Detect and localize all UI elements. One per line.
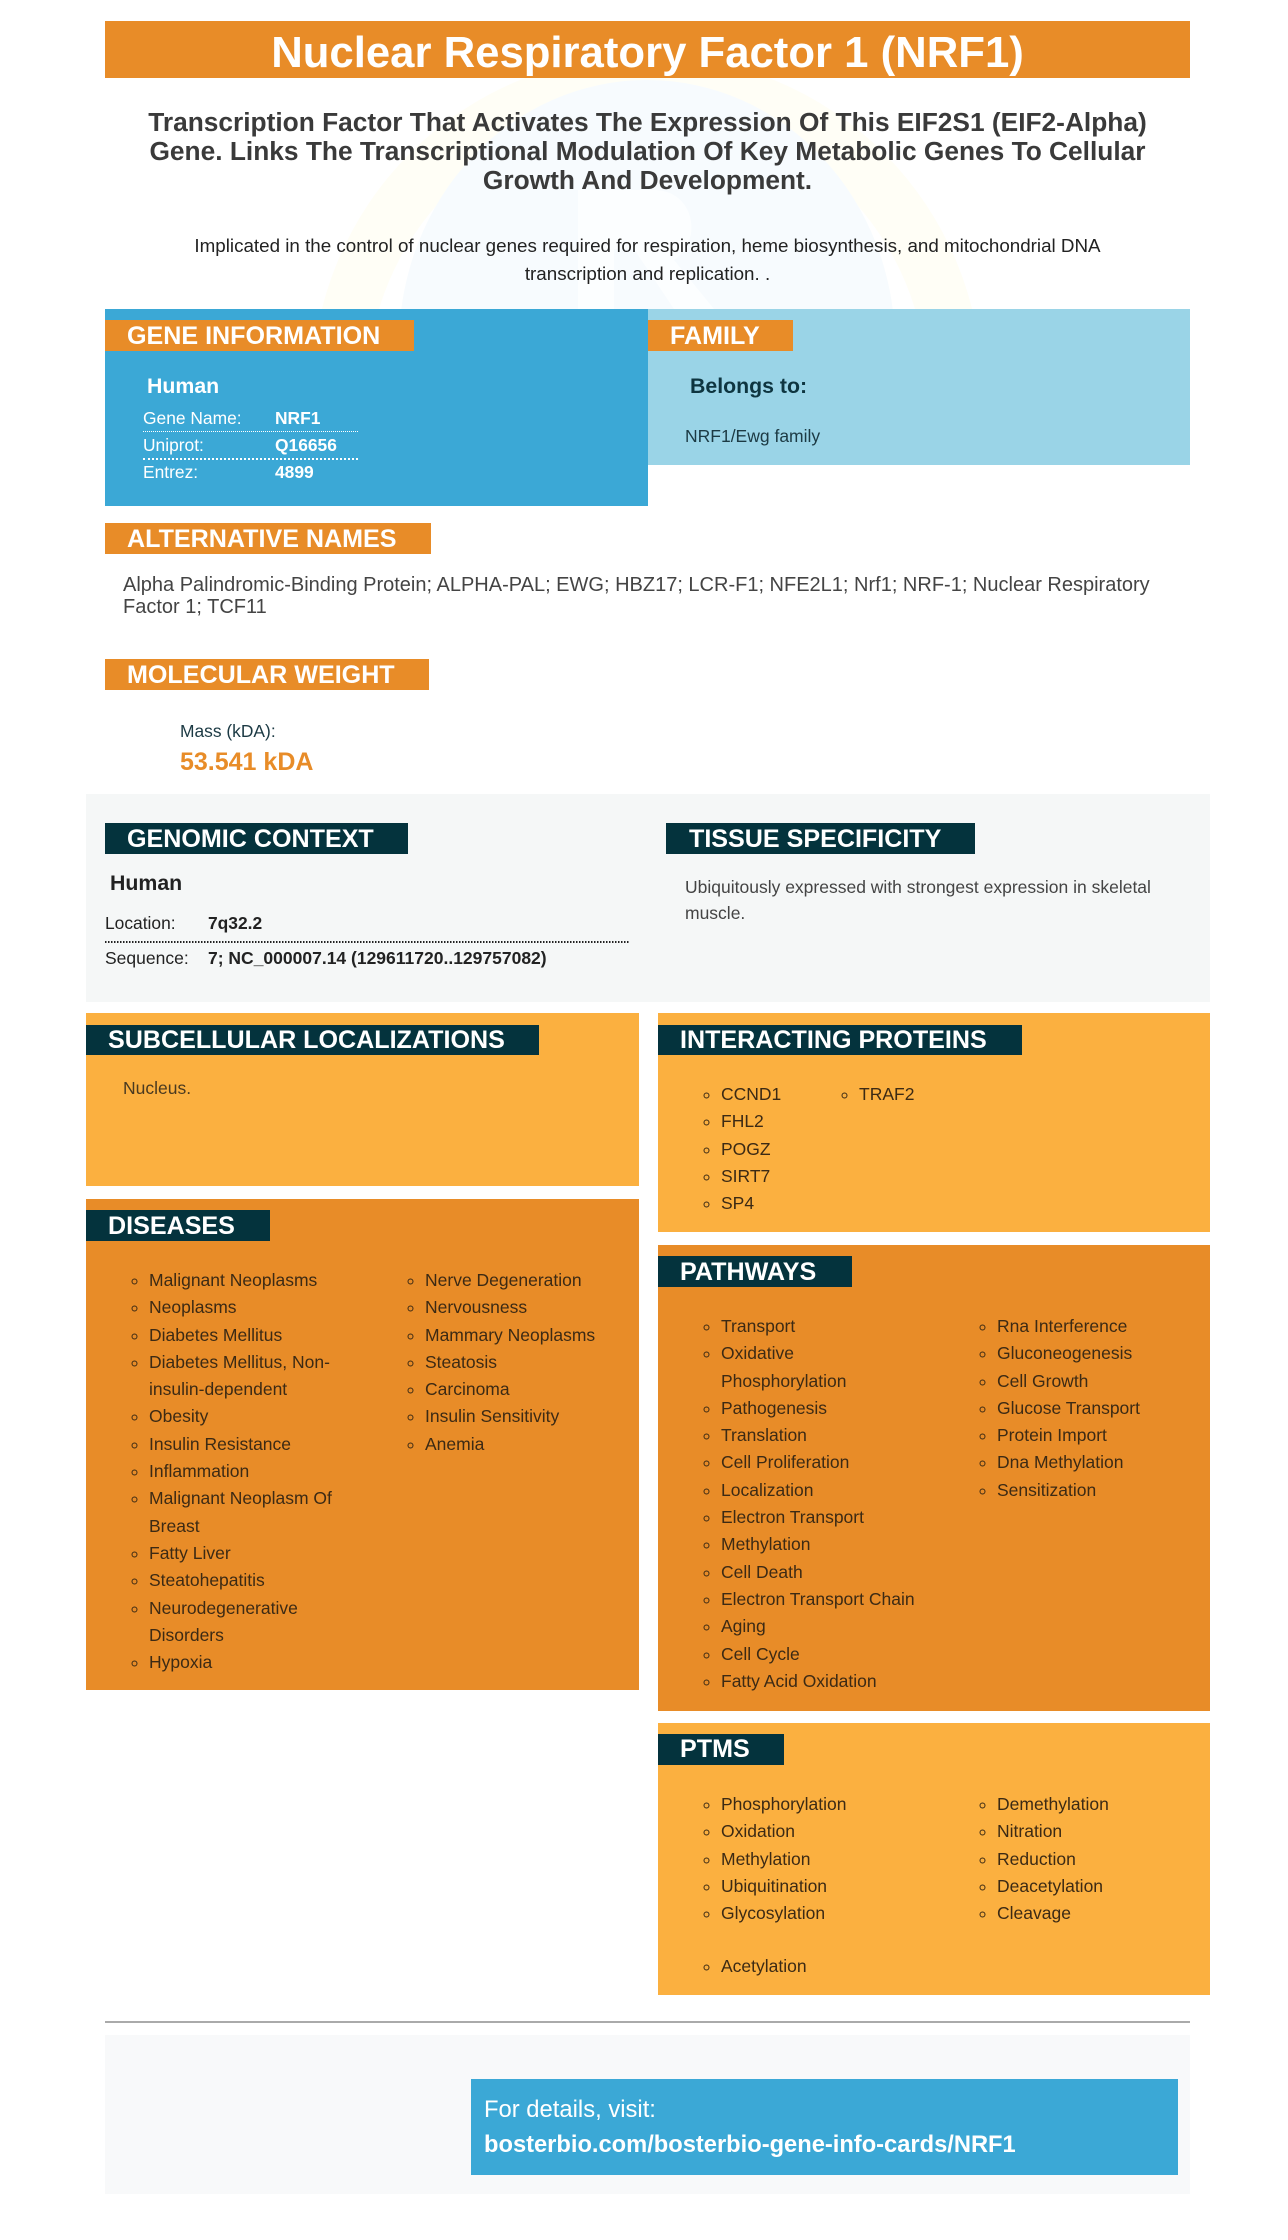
subtitle [148,107,1147,195]
location row: 7q32.2 [208,913,262,933]
disease list 2: Anemia [425,1434,484,1454]
tissue specificity text: Ubiquitously expressed with strongest expression in skeletal [685,877,1151,897]
alternative names text: Factor 1; TCF11 [123,596,267,618]
pathway list 2: Protein Import [997,1425,1107,1445]
disease list 1: insulin-dependent [149,1379,287,1399]
pathway list 2: Glucose Transport [997,1398,1140,1418]
heading: diseases [86,1210,270,1241]
heading: diseases: DISEASES [108,1212,235,1240]
location row [105,913,262,933]
gene info table: Gene Name: [143,408,242,428]
family value: NRF1/Ewg family [685,426,820,446]
heading: pathways [658,1256,852,1287]
heading: family [648,320,793,351]
subtitle: Gene. Links The Transcriptional Modulation Of Key Metabolic Genes To Cellular [149,136,1146,166]
localization text: Nucleus. [123,1078,191,1098]
disease list 2: Nerve Degeneration [425,1270,582,1290]
sequence row: Sequence: [105,948,189,968]
protein list 1: FHL2 [721,1111,764,1131]
panel: ptms [658,1723,1210,1995]
pathway list 1: Localization [721,1480,813,1500]
disease list 2: Nervousness [425,1297,527,1317]
subtitle: Growth And Development. [483,165,812,195]
ptm list 2: Cleavage [997,1903,1071,1923]
panel: gene information [105,309,648,506]
protein list 1: CCND1 [721,1084,781,1104]
disease list 2: Mammary Neoplasms [425,1325,595,1345]
heading: tissue specificity: TISSUE SPECIFICITY [689,825,941,853]
pathway list 1: Electron Transport Chain [721,1589,915,1609]
gene info table: Q16656 [275,435,337,455]
ptm list 1: Ubiquitination [721,1876,827,1896]
pathway list 2: Dna Methylation [997,1452,1123,1472]
disease list 2: Carcinoma [425,1379,510,1399]
callout url: bosterbio.com/bosterbio-gene-info-cards/NRF1 [484,2132,1016,2158]
panel: genomic context and tissue specificity [86,794,1210,1002]
description: Implicated in the control of nuclear genes required for respiration, heme biosynthesis, and mitochondrial DNA [194,235,1101,256]
alternative names text: Alpha Palindromic-Binding Protein; ALPHA-PAL; EWG; HBZ17; LCR-F1; NFE2L1; Nrf1; NRF-1; Nuclear Respiratory [123,574,1150,596]
gene info table [143,408,358,482]
heading: genomic context: GENOMIC CONTEXT [127,825,374,853]
pathway list 1: Cell Death [721,1562,803,1582]
species: human: Human [110,871,182,895]
pathway list 1: Cell Proliferation [721,1452,849,1472]
disease list 1: Malignant Neoplasms [149,1270,317,1290]
protein list 2: TRAF2 [859,1084,914,1104]
disease list 1: Insulin Resistance [149,1434,291,1454]
pathway list 1: Pathogenesis [721,1398,827,1418]
heading: alternative names: ALTERNATIVE NAMES [127,525,397,553]
pathway list 2: Sensitization [997,1480,1096,1500]
pathway list 2 [980,1316,1140,1500]
pathway list 1: Translation [721,1425,807,1445]
heading: interacting proteins: INTERACTING PROTEINS [680,1026,987,1054]
pathway list 1: Transport [721,1316,795,1336]
disease list 2: Insulin Sensitivity [425,1406,559,1426]
disease list 1: Obesity [149,1406,208,1426]
subtitle: Transcription Factor That Activates The Expression Of This EIF2S1 (EIF2-Alpha) [148,107,1147,137]
disease list 1: Hypoxia [149,1652,212,1672]
panel: pathways [658,1245,1210,1711]
pathway list 1: Phosphorylation [721,1371,846,1391]
callout: details link [471,2079,1178,2175]
disease list 1: Fatty Liver [149,1543,231,1563]
description: transcription and replication. . [525,263,770,284]
location row: Location: [105,913,176,933]
disease list 1: Diabetes Mellitus [149,1325,282,1345]
protein list 1: SP4 [721,1193,754,1213]
heading: ptms: PTMS [680,1735,750,1763]
heading: subcellular localizations: SUBCELLULAR LOCALIZATIONS [108,1026,505,1054]
watermark logo [322,78,972,309]
gene info table: Uniprot: [143,435,204,455]
pathway list 1: Electron Transport [721,1507,864,1527]
disease list 2: Steatosis [425,1352,497,1372]
disease list 1: Neurodegenerative [149,1598,298,1618]
ptm list 2 [980,1794,1109,1923]
ptm list 3: Acetylation [721,1956,807,1976]
disease list 2 [408,1270,595,1454]
pathway list 1: Aging [721,1616,766,1636]
callout label: For details, visit: [484,2096,656,2123]
disease list 1: Diabetes Mellitus, Non- [149,1352,330,1372]
pathway list 1: Cell Cycle [721,1644,800,1664]
description [194,235,1101,284]
ptm list 1: Phosphorylation [721,1794,846,1814]
protein list 1: SIRT7 [721,1166,770,1186]
disease list 1: Malignant Neoplasm Of [149,1488,332,1508]
panel: interacting proteins [658,1013,1210,1232]
panel: diseases [86,1199,639,1690]
pathway list 2: Cell Growth [997,1371,1088,1391]
heading: family: FAMILY [670,322,760,350]
title banner: Nuclear Respiratory Factor 1 (NRF1) [271,28,1024,77]
footer panel [105,2035,1190,2194]
disease list 1: Inflammation [149,1461,249,1481]
ptm list 1: Methylation [721,1849,810,1869]
title banner [105,21,1190,78]
disease list 1: Disorders [149,1625,224,1645]
pathway list 1: Methylation [721,1534,810,1554]
species: human: Human [147,374,219,398]
protein list 1 [704,1084,781,1213]
heading: pathways: PATHWAYS [680,1258,816,1286]
gene info table: 4899 [275,462,314,482]
heading: gene information: GENE INFORMATION [127,322,380,350]
gene info table: Entrez: [143,462,198,482]
panel: subcellular localizations [86,1013,639,1186]
ptm list 2: Deacetylation [997,1876,1103,1896]
mass value: 53.541 kDA [180,748,313,776]
ptm list 2: Demethylation [997,1794,1109,1814]
disease list 1 [132,1270,332,1672]
heading: molecular weight: MOLECULAR WEIGHT [127,661,395,689]
alternative names text [123,574,1150,618]
belongs to label: Belongs to: [690,374,807,398]
pathway list 1: Fatty Acid Oxidation [721,1671,877,1691]
ptm list 1 [704,1794,846,1923]
pathway list 1 [704,1316,915,1691]
ptm list 1: Glycosylation [721,1903,825,1923]
gene info table: NRF1 [275,408,320,428]
disease list 1: Neoplasms [149,1297,237,1317]
pathway list 2: Rna Interference [997,1316,1127,1336]
disease list 1: Steatohepatitis [149,1570,265,1590]
mass label: Mass (kDA): [180,721,276,741]
pathway list 2: Gluconeogenesis [997,1343,1132,1363]
ptm list 2: Nitration [997,1821,1062,1841]
pathway list 1: Oxidative [721,1343,794,1363]
heading: ptms [658,1734,784,1765]
tissue specificity text: muscle. [685,903,745,923]
tissue specificity text [685,877,1151,923]
sequence row: 7; NC_000007.14 (129611720..129757082) [208,948,547,968]
ptm list 2: Reduction [997,1849,1076,1869]
protein list 1: POGZ [721,1139,771,1159]
disease list 1: Breast [149,1516,200,1536]
ptm list 1: Oxidation [721,1821,795,1841]
panel: family [648,309,1190,465]
